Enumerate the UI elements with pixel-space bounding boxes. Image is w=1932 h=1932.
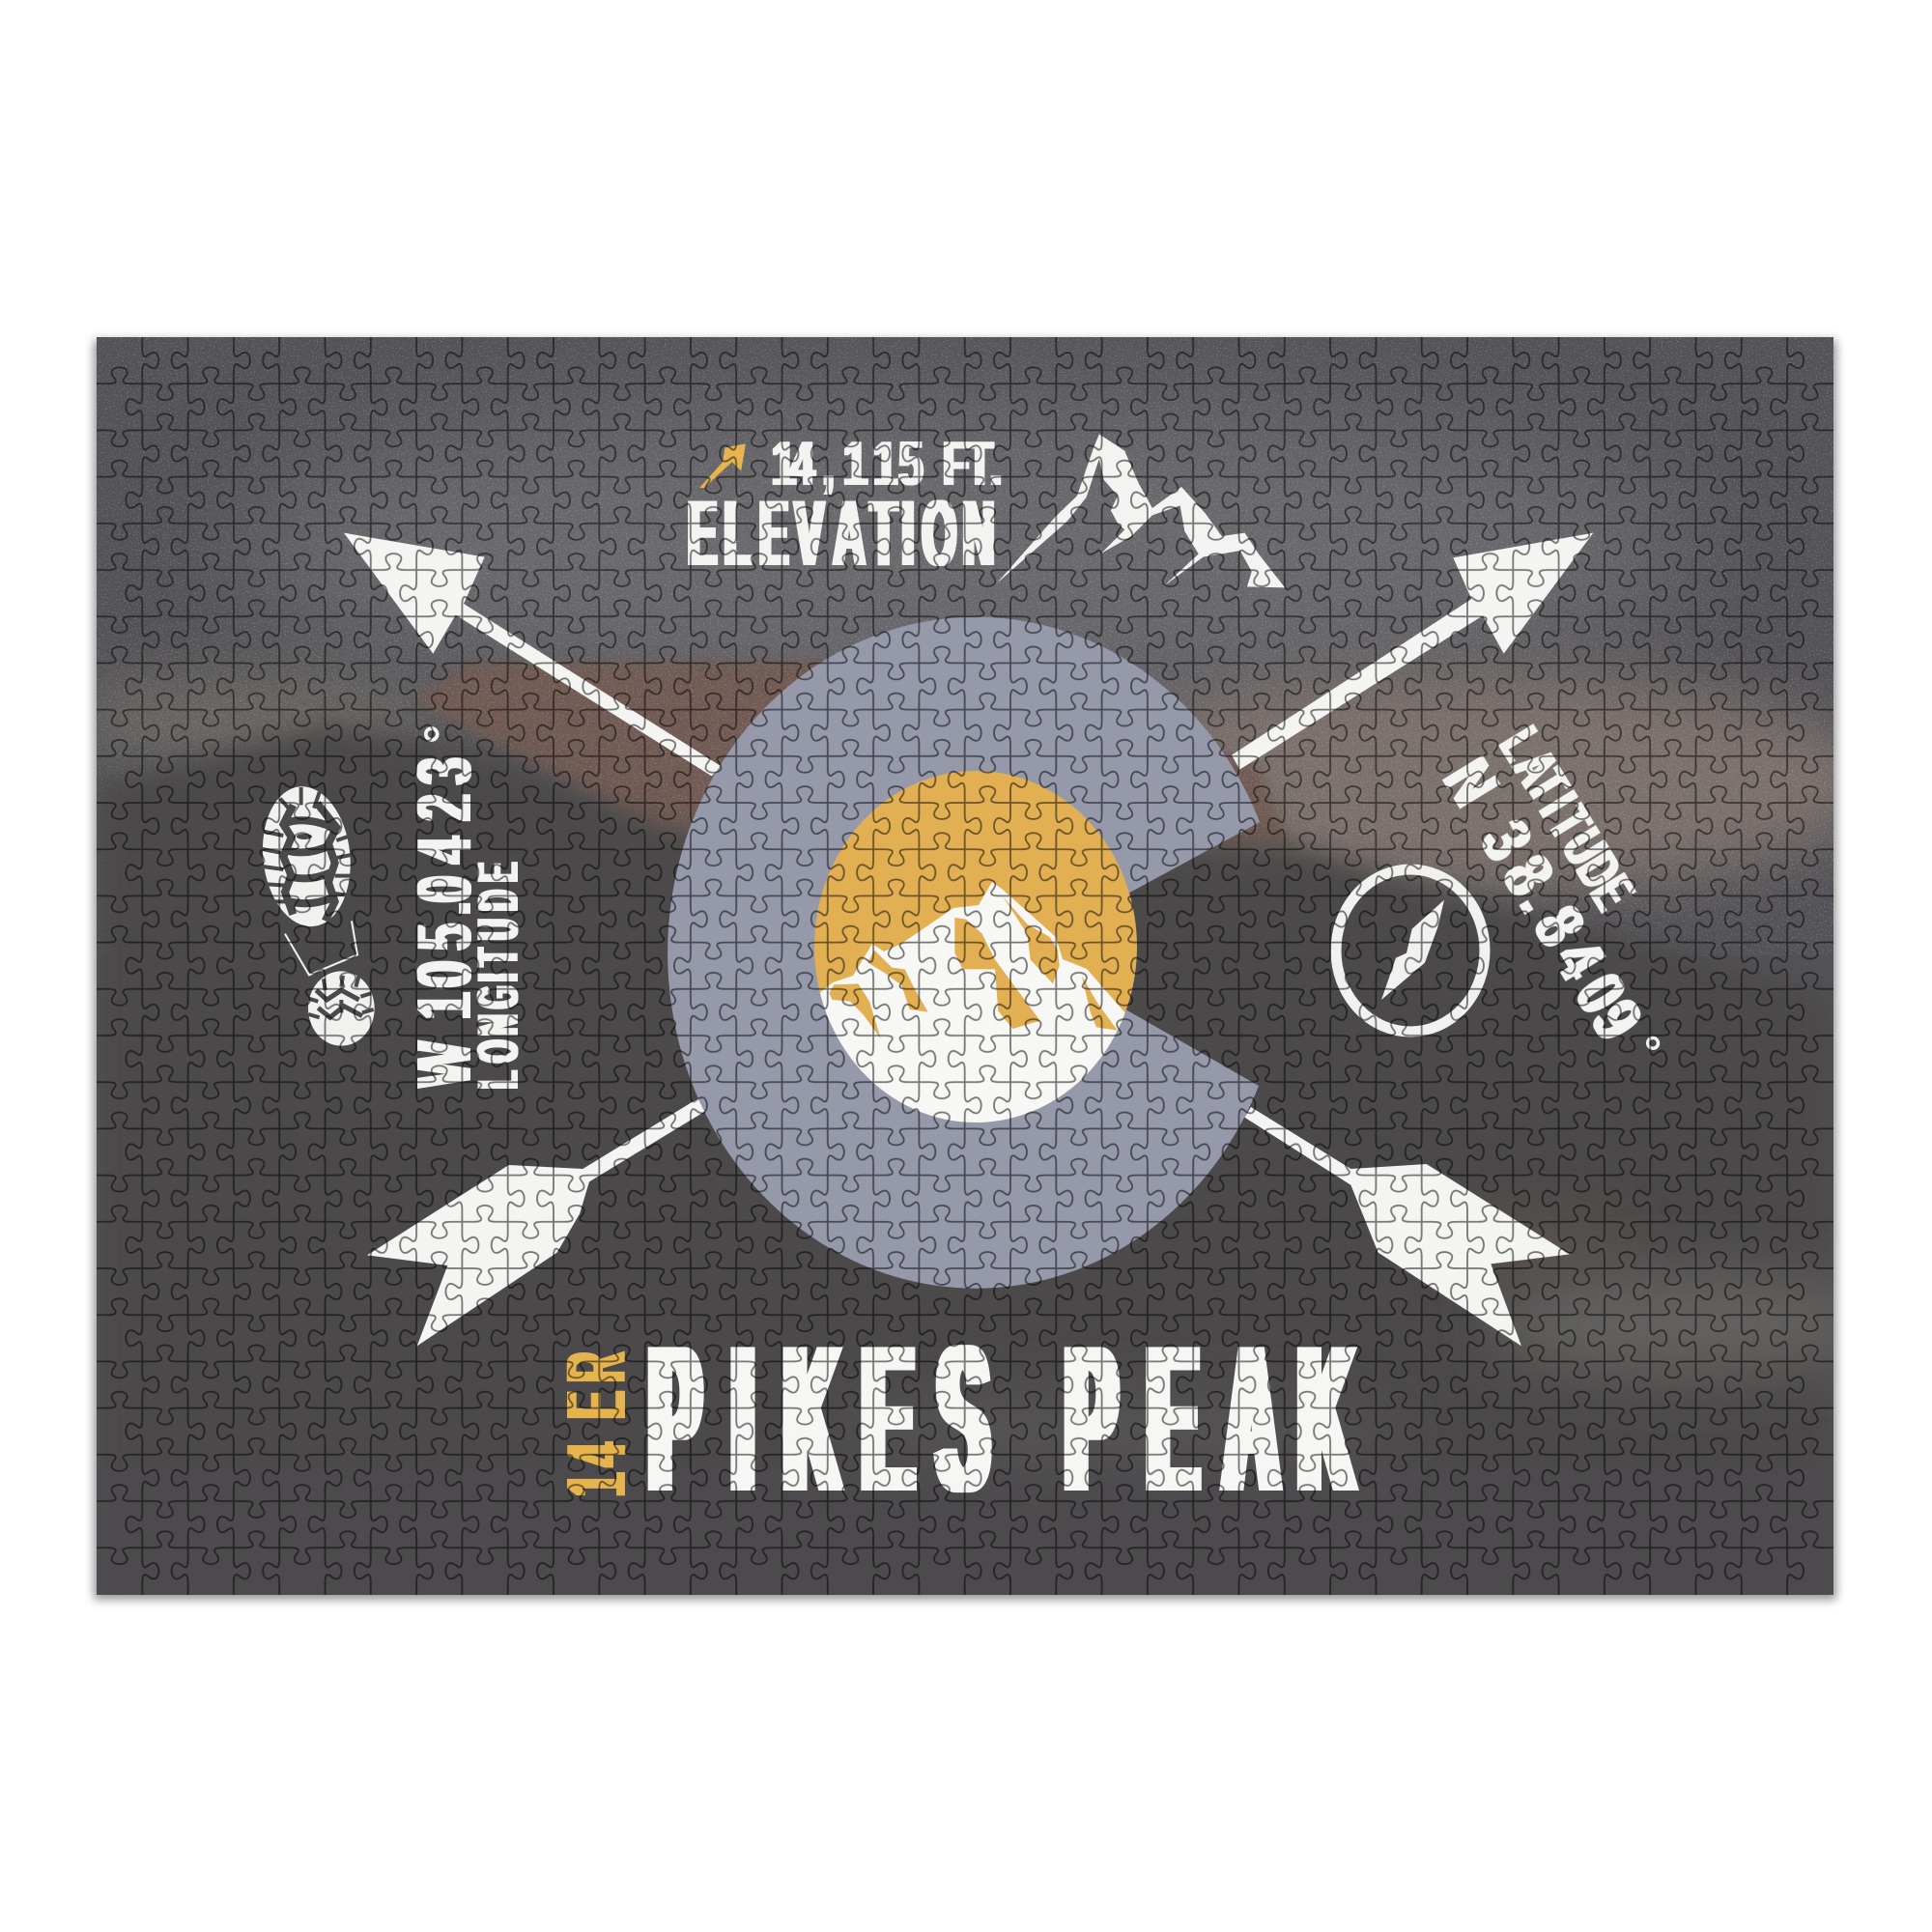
latitude label: LATITUDE bbox=[1487, 717, 1647, 921]
elevation label: ELEVATION bbox=[688, 481, 994, 585]
mountain shadows bbox=[829, 896, 1118, 1038]
arrow: north-east bbox=[1232, 533, 1593, 770]
snow mountain bbox=[819, 882, 1125, 1122]
14er label: 14ER bbox=[550, 1352, 643, 1496]
arrow: south-east bbox=[1244, 1107, 1570, 1346]
boot heel bbox=[308, 971, 375, 1046]
icon: mountain outline bbox=[997, 434, 1285, 587]
panel drop shadow bbox=[94, 340, 1836, 1600]
arrow: south-west bbox=[367, 1098, 708, 1346]
latitude degree sign: ° bbox=[1619, 1027, 1671, 1068]
boot shank bbox=[285, 921, 357, 975]
puzzle cut lines bbox=[97, 337, 1833, 1595]
Colorado C emblem bbox=[668, 617, 1260, 1289]
title: Pikes Peak: PIKES PEAK bbox=[649, 1303, 1353, 1536]
elevation value: 14,115 FT. bbox=[772, 428, 1002, 498]
longitude label: LONGITUDE bbox=[467, 863, 531, 1089]
compass ring bbox=[1336, 869, 1485, 1032]
panel: puzzle night-sky background bbox=[68, 337, 1874, 1642]
latitude value: N 38.8409 bbox=[1428, 747, 1657, 1053]
longitude value: W 105.0423 bbox=[402, 757, 488, 1087]
icon: compass bbox=[1336, 869, 1485, 1032]
sun disc with snowy mountain bbox=[802, 771, 1150, 1130]
boot sole front bbox=[256, 782, 357, 931]
elevation icon: gold arrow bbox=[699, 443, 746, 488]
longitude degree sign: ° bbox=[414, 724, 469, 744]
arrow: north-west bbox=[344, 533, 722, 776]
icon: boot print bbox=[256, 782, 375, 1046]
compass needle bbox=[1381, 900, 1444, 1000]
